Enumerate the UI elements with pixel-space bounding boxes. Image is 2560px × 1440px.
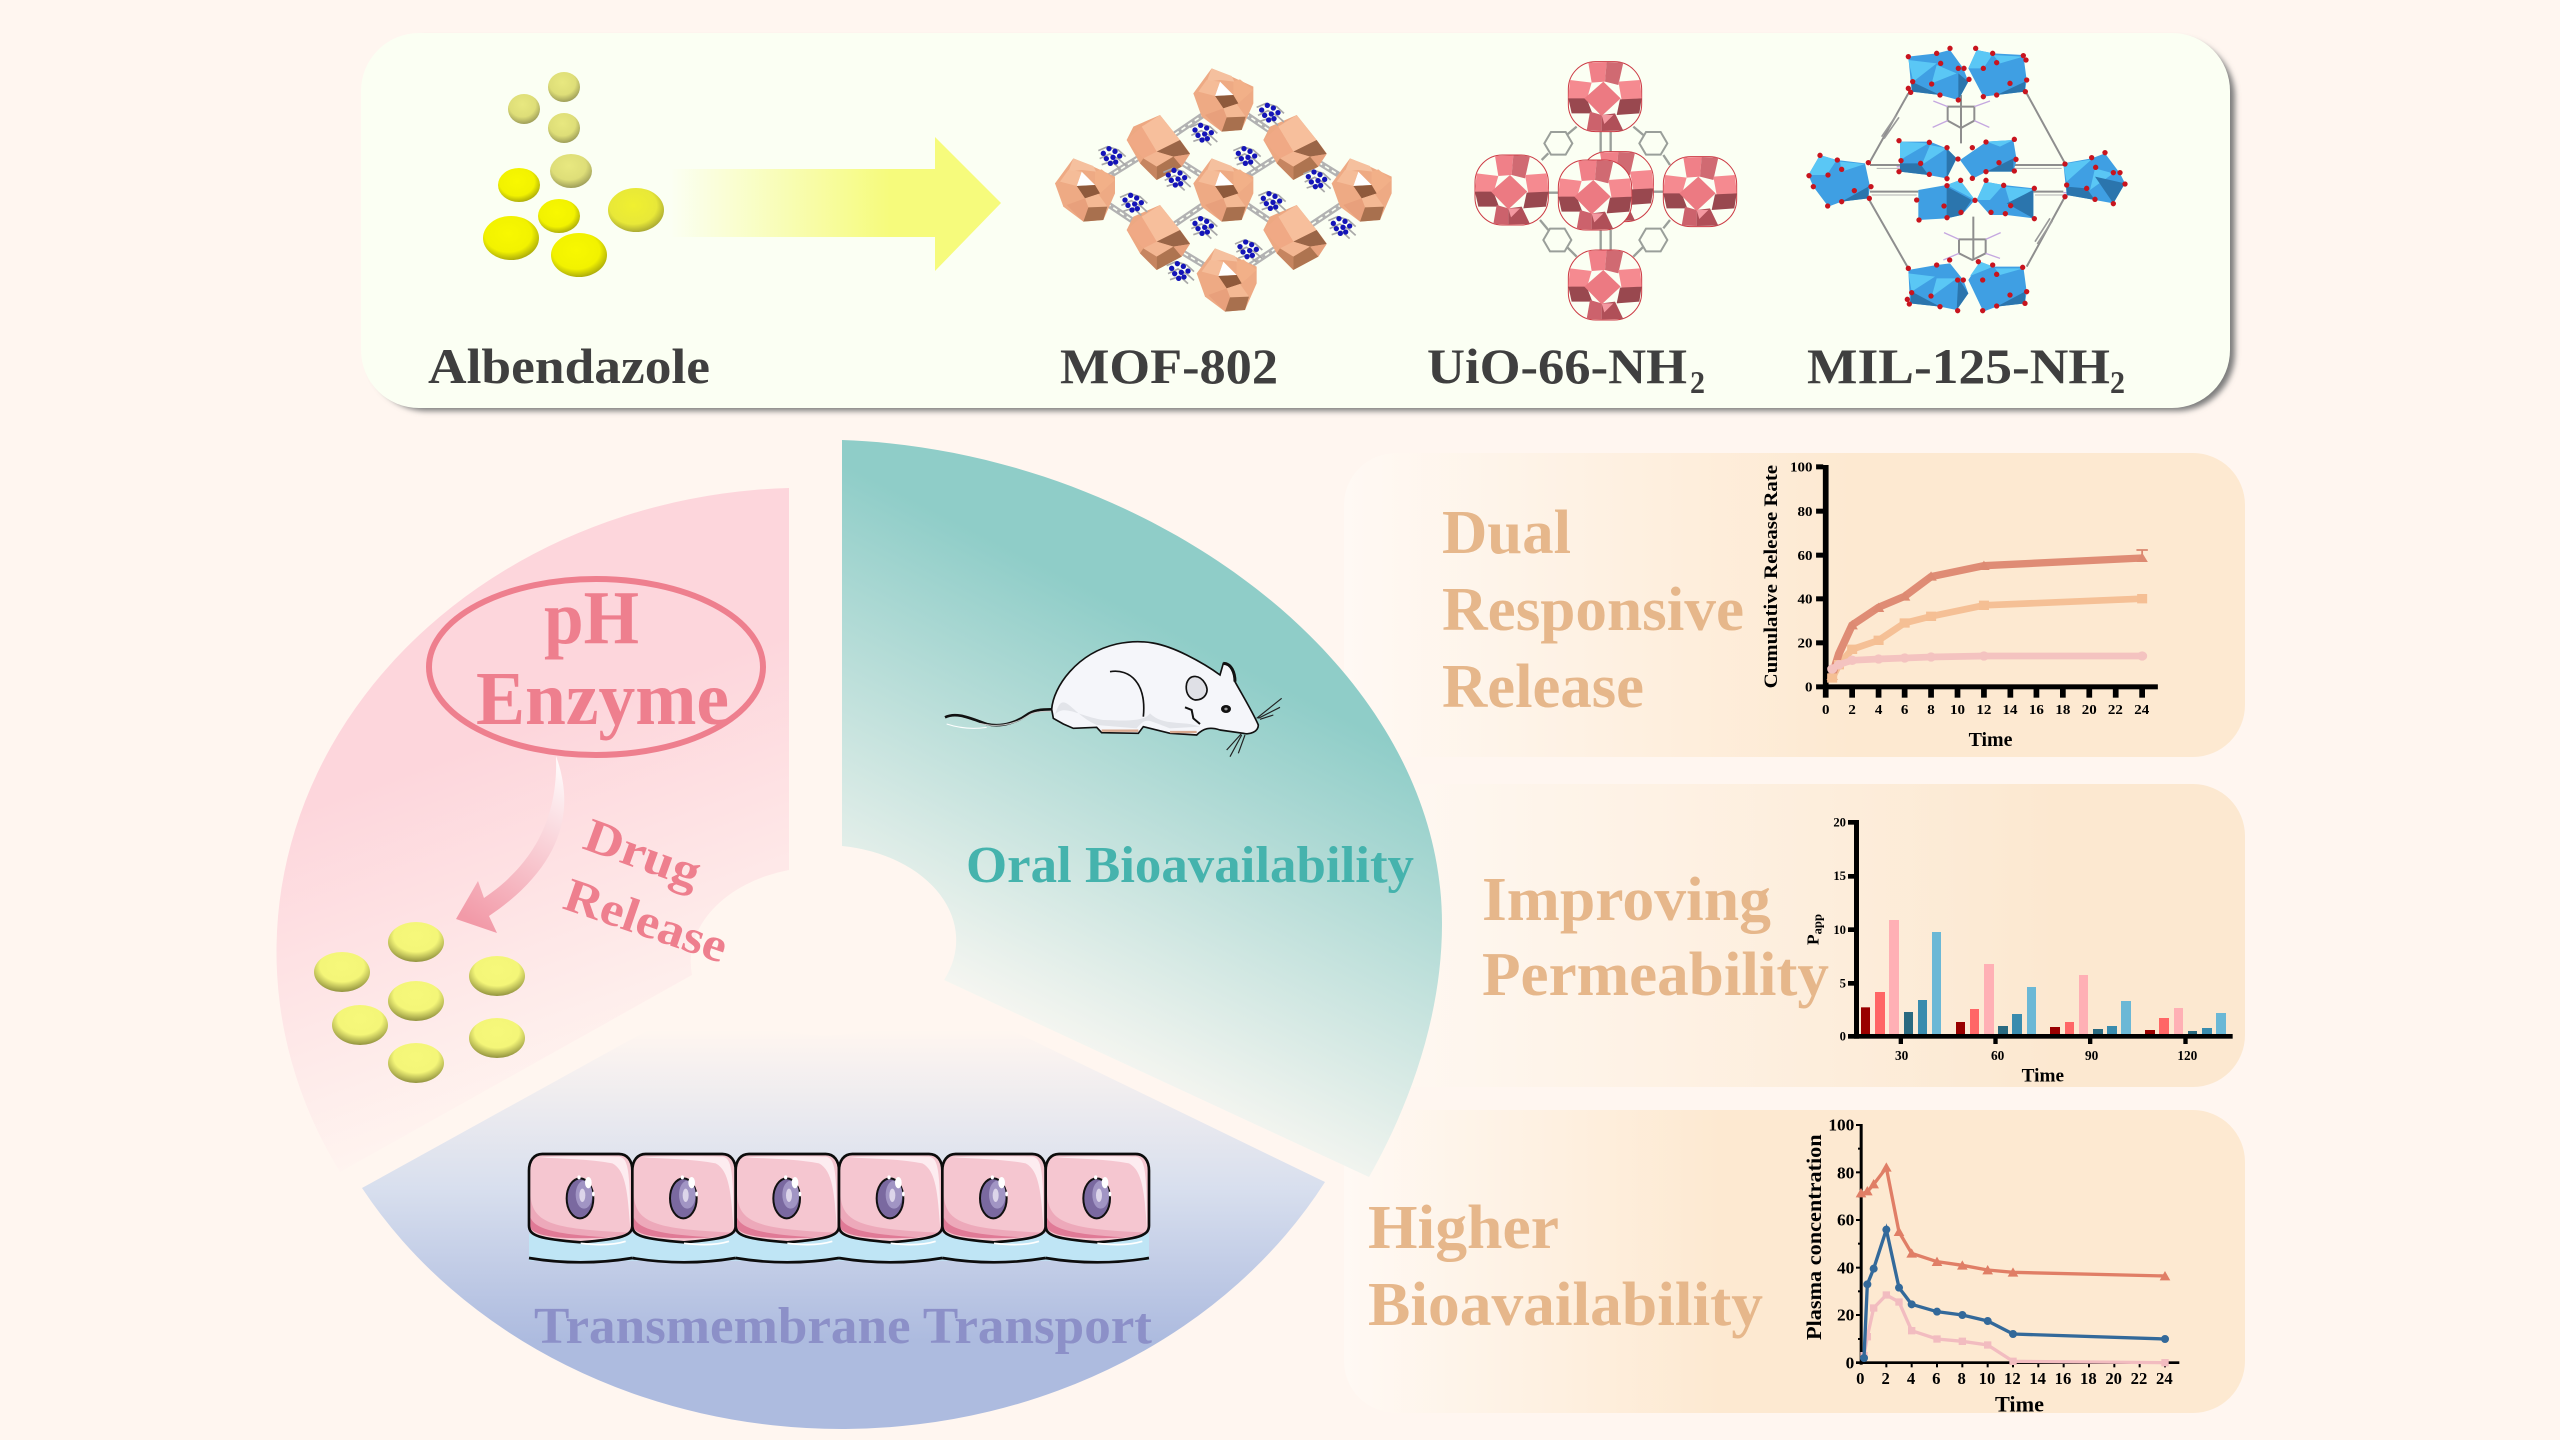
heading: Dual Responsive Release: Dual (1442, 499, 1571, 567)
icon: cell layer (529, 1154, 1149, 1262)
chart: plasma concentration: 24 (2156, 1369, 2173, 1388)
chart: plasma concentration: 0 (1846, 1353, 1854, 1372)
icon: mouse (945, 642, 1282, 757)
label: Drug Release: Release (557, 868, 734, 973)
label: MIL-125-NH2: MIL-125-NH (1807, 338, 2110, 394)
panel: blue sector (362, 993, 1325, 1429)
chart: cumulative release: 100 (1790, 460, 1812, 476)
chart: plasma concentration: 10 (1979, 1369, 1995, 1388)
chart: cumulative release: 0 (1822, 702, 1829, 718)
chart: cumulative release: 0 (1805, 680, 1812, 695)
heading: Improving Permeability: Permeability (1482, 941, 1829, 1009)
chart: plasma concentration: 100 (1828, 1116, 1854, 1135)
panel: dual responsive release background (1344, 453, 2245, 757)
chart: plasma concentration: 2 (1882, 1369, 1890, 1388)
chart: cumulative release: 24 (2134, 702, 2149, 718)
chart: plasma concentration: 60 (1837, 1211, 1854, 1230)
chart: plasma concentration: 20 (1837, 1306, 1854, 1325)
chart: plasma concentration: 18 (2080, 1369, 2097, 1388)
heading: Higher Bioavailability: Bioavailability (1368, 1271, 1763, 1339)
chart: cumulative release: 40 (1798, 592, 1812, 608)
heading: Dual Responsive Release (1442, 499, 1744, 721)
chart: Papp bars: 120 (2177, 1048, 2198, 1063)
chart: Papp bars: 60 (1991, 1048, 2005, 1063)
chart: Papp bars: P (1803, 934, 1822, 945)
chart: cumulative release: 14 (2003, 702, 2017, 718)
chart: cumulative release: 10 (1950, 702, 1965, 718)
chart: cumulative release: 20 (1798, 636, 1812, 652)
chart: plasma concentration: 16 (2055, 1369, 2071, 1388)
chart: cumulative release: 18 (2055, 702, 2070, 718)
chart: cumulative release: 60 (1798, 548, 1812, 564)
panel: MOF carriers (361, 33, 2235, 411)
chart: plasma concentration: 6 (1932, 1369, 1940, 1388)
arrow: loading (672, 137, 1001, 271)
chart: cumulative release: 2 (1848, 702, 1856, 718)
chart: plasma concentration: 0 (1856, 1369, 1864, 1388)
label: Drug Release (557, 809, 734, 973)
label: UiO-66-NH2: 2 (1690, 364, 1705, 400)
chart: cumulative release: 20 (2082, 702, 2097, 718)
callout: pH Enzyme: Enzyme (476, 657, 729, 741)
icon: albendazole particles (483, 72, 664, 277)
label: MIL-125-NH2: 2 (2110, 364, 2125, 400)
panel: teal sector (842, 440, 1442, 1177)
chart: cumulative release: Time (1969, 730, 2012, 751)
chart: Papp bars: 10 (1833, 923, 1846, 937)
chart: plasma concentration: 4 (1907, 1369, 1916, 1388)
label: Transmembrane Transport: Transmembrane Transport (534, 1298, 1153, 1355)
chart: Papp bars: Time (2022, 1066, 2064, 1087)
chart: plasma concentration: 80 (1837, 1163, 1854, 1182)
chart: Papp bars: app (1811, 914, 1825, 934)
chart: cumulative release: Cumulative Release Rate (1761, 465, 1781, 688)
panel: pink sector (276, 488, 789, 1172)
arrow: drug release curve (456, 756, 564, 933)
chart: cumulative release (1761, 460, 2158, 751)
chart: Papp bars: 20 (1833, 816, 1846, 830)
chart: plasma concentration: 22 (2131, 1369, 2147, 1388)
heading: Improving Permeability: Improving (1482, 866, 1771, 934)
callout: pH Enzyme: pH (544, 576, 639, 660)
chart: cumulative release: 80 (1798, 504, 1812, 520)
chart: cumulative release: 6 (1901, 702, 1908, 718)
chart: cumulative release: 8 (1927, 702, 1935, 718)
label: Albendazole: Albendazole (428, 338, 710, 394)
heading: Dual Responsive Release: Responsive (1442, 576, 1744, 644)
label: UiO-66-NH2: UiO-66-NH (1427, 338, 1687, 394)
label: Oral Bioavailability: Oral Bioavailability (966, 837, 1414, 894)
chart: plasma concentration: 12 (2004, 1369, 2021, 1388)
chart: cumulative release: 4 (1875, 702, 1882, 718)
chart: plasma concentration (1804, 1116, 2179, 1417)
chart: cumulative release: 12 (1976, 702, 1991, 718)
label: MOF-802: MOF-802 (1060, 338, 1278, 394)
chart: Papp bars: 5 (1840, 976, 1846, 990)
icon: UiO-66-NH2 structure (1475, 62, 1737, 320)
chart: plasma concentration: 20 (2105, 1369, 2122, 1388)
heading: Dual Responsive Release: Release (1442, 653, 1644, 721)
chart: plasma concentration: Plasma concentration (1804, 1134, 1826, 1340)
chart: Papp bars: 0 (1840, 1030, 1846, 1044)
icon: released drug particles (314, 922, 525, 1083)
chart: Papp bars (1803, 816, 2233, 1087)
chart: plasma concentration: 40 (1837, 1258, 1854, 1277)
chart: Papp bars: 30 (1895, 1048, 1909, 1063)
chart: plasma concentration: 8 (1958, 1369, 1966, 1388)
chart: cumulative release: 16 (2029, 702, 2044, 718)
icon: MOF-802 structure (1055, 68, 1392, 312)
callout: pH Enzyme (429, 576, 763, 755)
panel: higher bioavailability background (1344, 1110, 2245, 1413)
chart: plasma concentration: 14 (2029, 1369, 2047, 1388)
icon: MIL-125-NH2 structure (1806, 46, 2128, 313)
heading: Higher Bioavailability (1368, 1194, 1763, 1339)
heading: Higher Bioavailability: Higher (1368, 1194, 1559, 1262)
heading: Improving Permeability (1482, 866, 1829, 1009)
panel: improving permeability background (1344, 784, 2245, 1087)
chart: cumulative release: 22 (2108, 702, 2123, 718)
chart: plasma concentration: Time (1995, 1392, 2044, 1417)
chart: Papp bars: 15 (1833, 869, 1846, 883)
chart: Papp bars: 90 (2085, 1048, 2099, 1063)
label: Drug Release: Drug (577, 809, 708, 899)
